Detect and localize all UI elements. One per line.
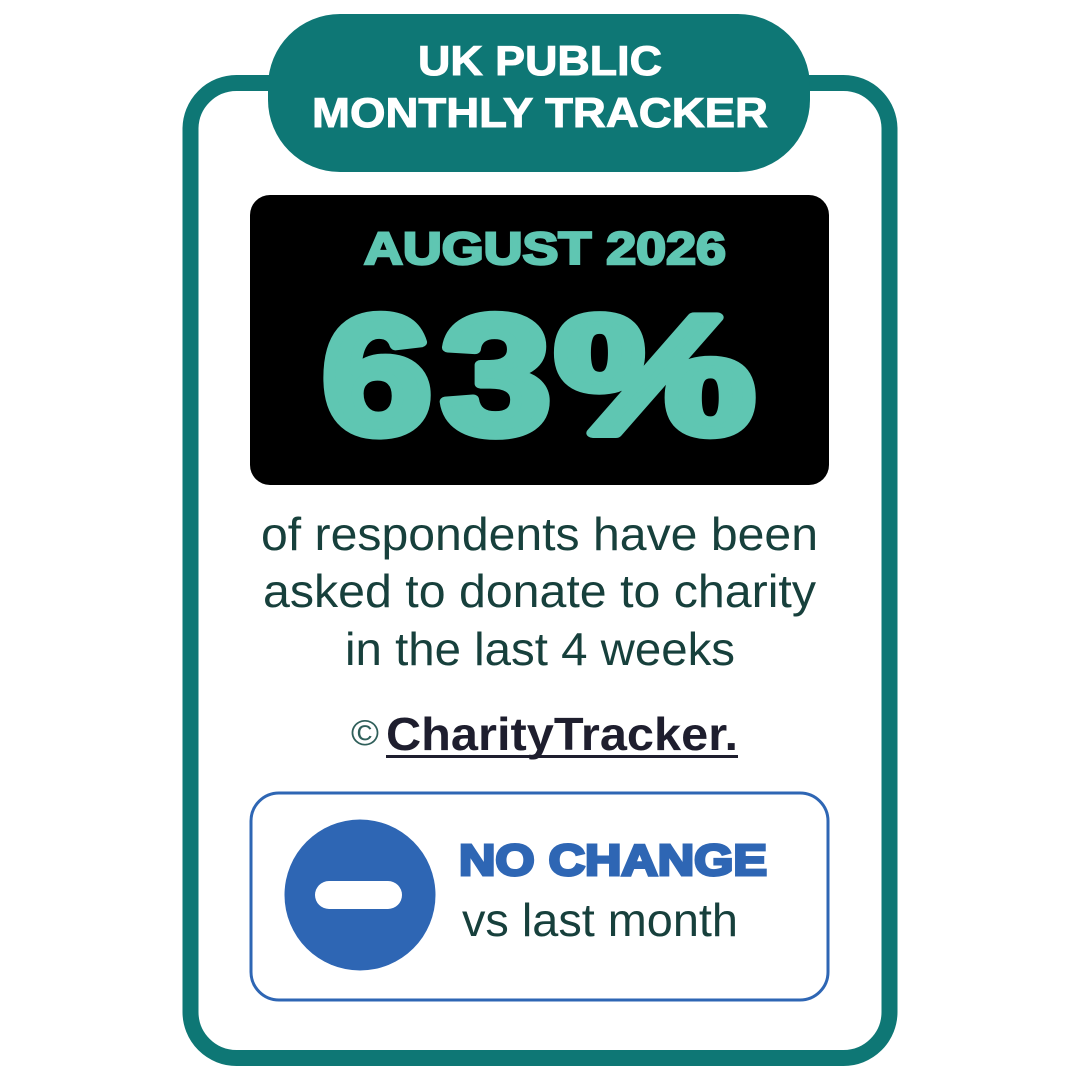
statistic: 63%: 6 xyxy=(322,281,432,469)
heading: UK Public Monthly Tracker: UK PUBLIC xyxy=(418,37,662,84)
description text: in the last 4 weeks xyxy=(345,623,735,675)
description text: of respondents have been xyxy=(261,508,818,560)
heading: UK Public Monthly Tracker xyxy=(312,37,768,136)
statistic: 63%: % xyxy=(555,281,755,469)
label: No change: NO CHANGE xyxy=(459,836,767,885)
heading: UK Public Monthly Tracker: MONTHLY TRACKER xyxy=(312,89,768,136)
label: vs last month: vs last month xyxy=(462,894,738,946)
statistic: 63% xyxy=(322,281,755,469)
icon: minus in circle xyxy=(284,820,436,970)
panel: black statistic box xyxy=(250,195,829,485)
logo: CharityTracker: © xyxy=(351,712,379,753)
description text: asked to donate to charity xyxy=(263,565,816,617)
panel: teal rounded frame xyxy=(190,83,890,1058)
header pill xyxy=(268,14,810,172)
statistic: 63%: 3 xyxy=(441,281,551,469)
logo: CharityTracker: CharityTracker. xyxy=(386,708,738,760)
description text xyxy=(261,508,818,675)
date label: August 2026: AUGUST 2026 xyxy=(364,223,726,274)
panel: month-on-month change xyxy=(251,793,828,1000)
